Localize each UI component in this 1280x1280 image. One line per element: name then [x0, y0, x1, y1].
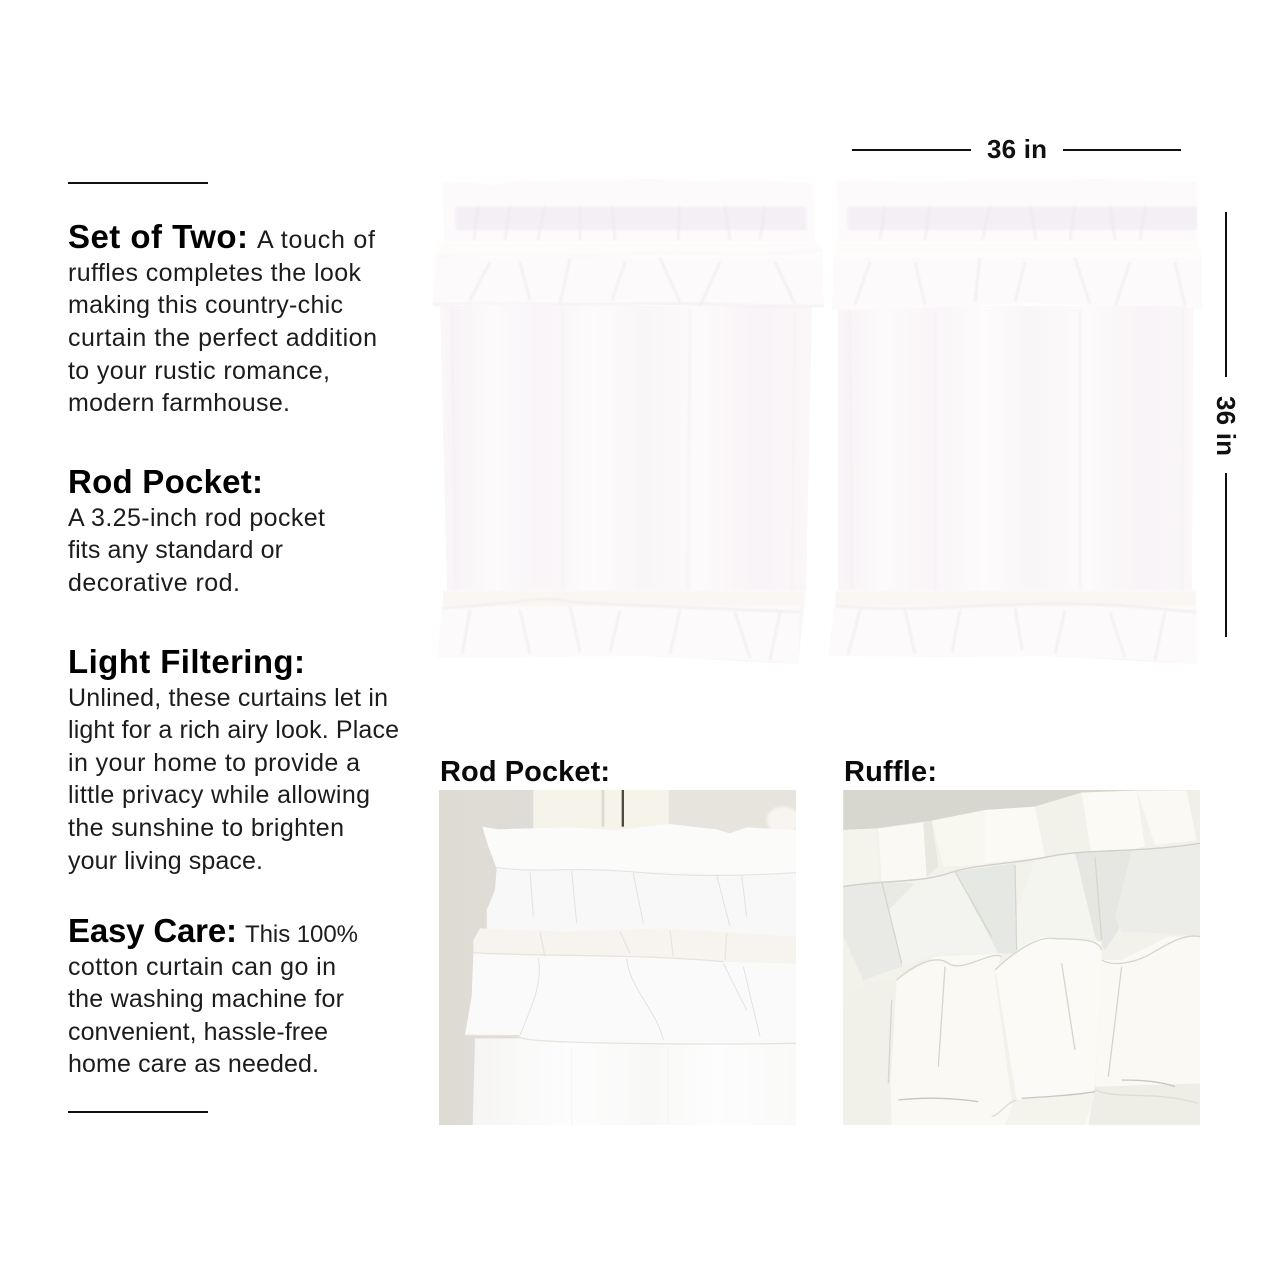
text block: Light Filtering: your living space. [68, 847, 263, 875]
ruffle band [473, 928, 797, 963]
text block: Rod Pocket: decorative rod. [68, 569, 240, 597]
heading: Ruffle photo: Ruffle: [844, 756, 937, 788]
upper heading pleats [843, 790, 1202, 887]
text block: Light Filtering: Light Filtering: [68, 643, 305, 680]
text block: Set of Two: ruffles completes the look [68, 259, 362, 287]
middle gathered ruffle [844, 850, 1132, 980]
rod pocket body [487, 867, 797, 937]
window trim [533, 790, 800, 833]
bottom divider line [68, 1111, 208, 1113]
dimension: height 36 in: 36 in [1211, 396, 1241, 456]
lower ruffle panels [890, 937, 1200, 1125]
text block: Easy Care: Easy Care: [68, 912, 237, 949]
text block: Light Filtering: the sunshine to brighten [68, 814, 344, 842]
text block: Light Filtering: in your home to provide a [68, 749, 360, 777]
text block: Light Filtering: little privacy while allowing [68, 781, 370, 809]
text block: Set of Two: A touch of [257, 226, 375, 254]
photo: ruffle close-up [843, 790, 1202, 1125]
text block: Set of Two [68, 218, 377, 417]
text block: Rod Pocket: A 3.25-inch rod pocket [68, 504, 325, 532]
lower ruffle [465, 953, 797, 1045]
text block: Set of Two: to your rustic romance, [68, 357, 330, 385]
text block: Light Filtering: Unlined, these curtains let in [68, 684, 388, 712]
text block: Rod Pocket: Rod Pocket: [68, 463, 263, 500]
curtain panel: left [433, 179, 824, 664]
text block: Set of Two: making this country-chic [68, 291, 343, 319]
heading: Rod Pocket photo: Rod Pocket: [440, 756, 610, 788]
text block: Easy Care: the washing machine for [68, 985, 344, 1013]
text block: Set of Two: Set of Two: [68, 218, 248, 255]
dimension: width 36 in: 36 in [987, 134, 1047, 164]
text block: Easy Care [68, 912, 358, 1078]
text block: Easy Care: home care as needed. [68, 1050, 319, 1078]
text block: Rod Pocket: fits any standard or [68, 536, 283, 564]
text block: Light Filtering: light for a rich airy look. Place [68, 716, 399, 744]
top divider line [68, 182, 208, 184]
ceiling background [843, 790, 1202, 830]
photo: rod pocket close-up [439, 790, 800, 1125]
text block: Set of Two: modern farmhouse. [68, 389, 290, 417]
text block: Set of Two: curtain the perfect addition [68, 324, 377, 352]
curtain body [473, 1038, 797, 1125]
text block: Easy Care: convenient, hassle-free [68, 1018, 328, 1046]
curtain header [482, 824, 797, 875]
curtain panel: right [828, 179, 1202, 664]
text block: Rod Pocket [68, 463, 325, 597]
text block: Light Filtering [68, 643, 399, 875]
text block: Easy Care: This 100% [245, 921, 358, 948]
text block: Easy Care: cotton curtain can go in [68, 953, 336, 981]
